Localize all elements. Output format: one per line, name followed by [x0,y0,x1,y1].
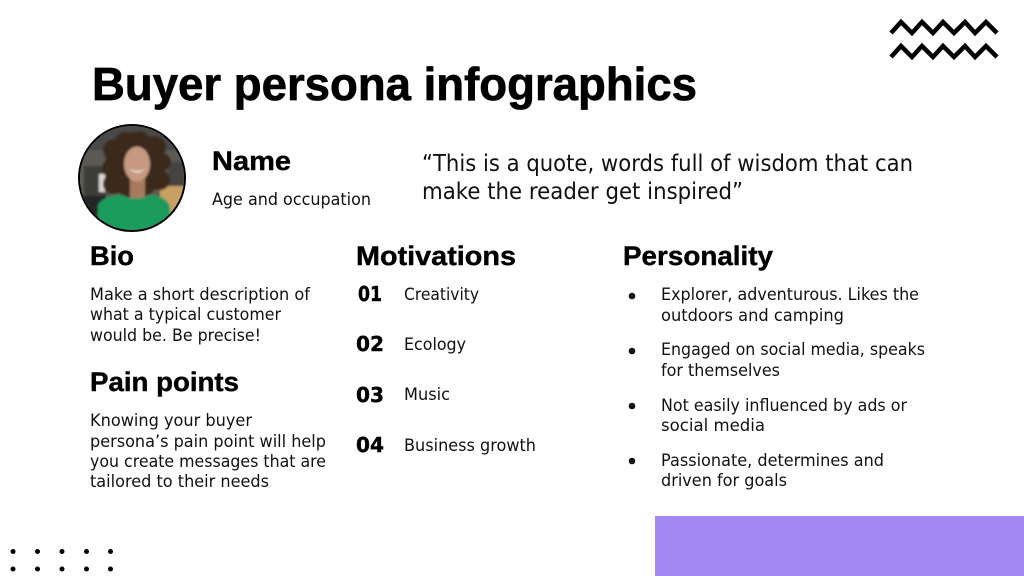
personality item 4 [629,451,884,490]
quote: “This is a quote, words full of wisdom that can [422,149,913,177]
quote [422,149,913,205]
panel: bio [90,241,311,345]
personality item 2 [629,340,925,380]
motivation 04: Business growth [404,436,536,455]
personality item 3: Not easily influenced by ads or [661,396,907,415]
pain points text: persona’s pain point will help [90,432,326,451]
pain points text [90,411,326,491]
bio heading: Bio [90,241,134,271]
motivation 02: Ecology [404,335,466,354]
pain points text: tailored to their needs [90,472,269,491]
pain points text: you create messages that are [90,452,326,471]
motivation 01: Creativity [404,285,479,304]
personality heading: Personality [623,241,773,271]
personality item 2: for themselves [661,361,780,380]
pain points text: Knowing your buyer [90,411,252,430]
panel: personality [623,241,925,490]
personality item 3: social media [661,416,765,435]
personality item 1: outdoors and camping [661,306,844,325]
age and occupation: Age and occupation [212,190,371,209]
quote: make the reader get inspired” [422,177,743,205]
persona photo [78,124,188,232]
personality item 1: Explorer, adventurous. Likes the [661,285,919,304]
personality item 2: Engaged on social media, speaks [661,340,925,359]
motivation 02: 02 [356,332,384,356]
personality item 4: driven for goals [661,471,787,490]
motivation 03 [356,383,450,407]
hair [102,131,171,198]
motivation 01 [358,282,479,306]
purple corner block [655,516,1024,576]
bio text: what a typical customer [90,305,281,324]
motivation 01: 01 [358,282,382,306]
personality item 3 [629,396,907,435]
motivation 04 [356,433,536,457]
bio text: would be. Be precise! [90,326,261,345]
motivations heading: Motivations [356,241,516,271]
personality item 4: Passionate, determines and [661,451,884,470]
motivation 03: Music [404,385,450,404]
personality item 1 [629,285,919,325]
bio text [90,285,311,345]
pain points heading: Pain points [90,367,239,397]
bio text: Make a short description of [90,285,311,304]
motivation 02 [356,332,466,356]
motivation 04: 04 [356,433,384,457]
persona name: Name [212,146,291,176]
panel: motivations [356,241,536,457]
motivation 03: 03 [356,383,384,407]
panel: pain points [90,367,326,491]
icon: zigzag decoration [891,22,997,57]
dot grid decoration [10,549,113,572]
title: Buyer persona infographics [92,58,697,110]
